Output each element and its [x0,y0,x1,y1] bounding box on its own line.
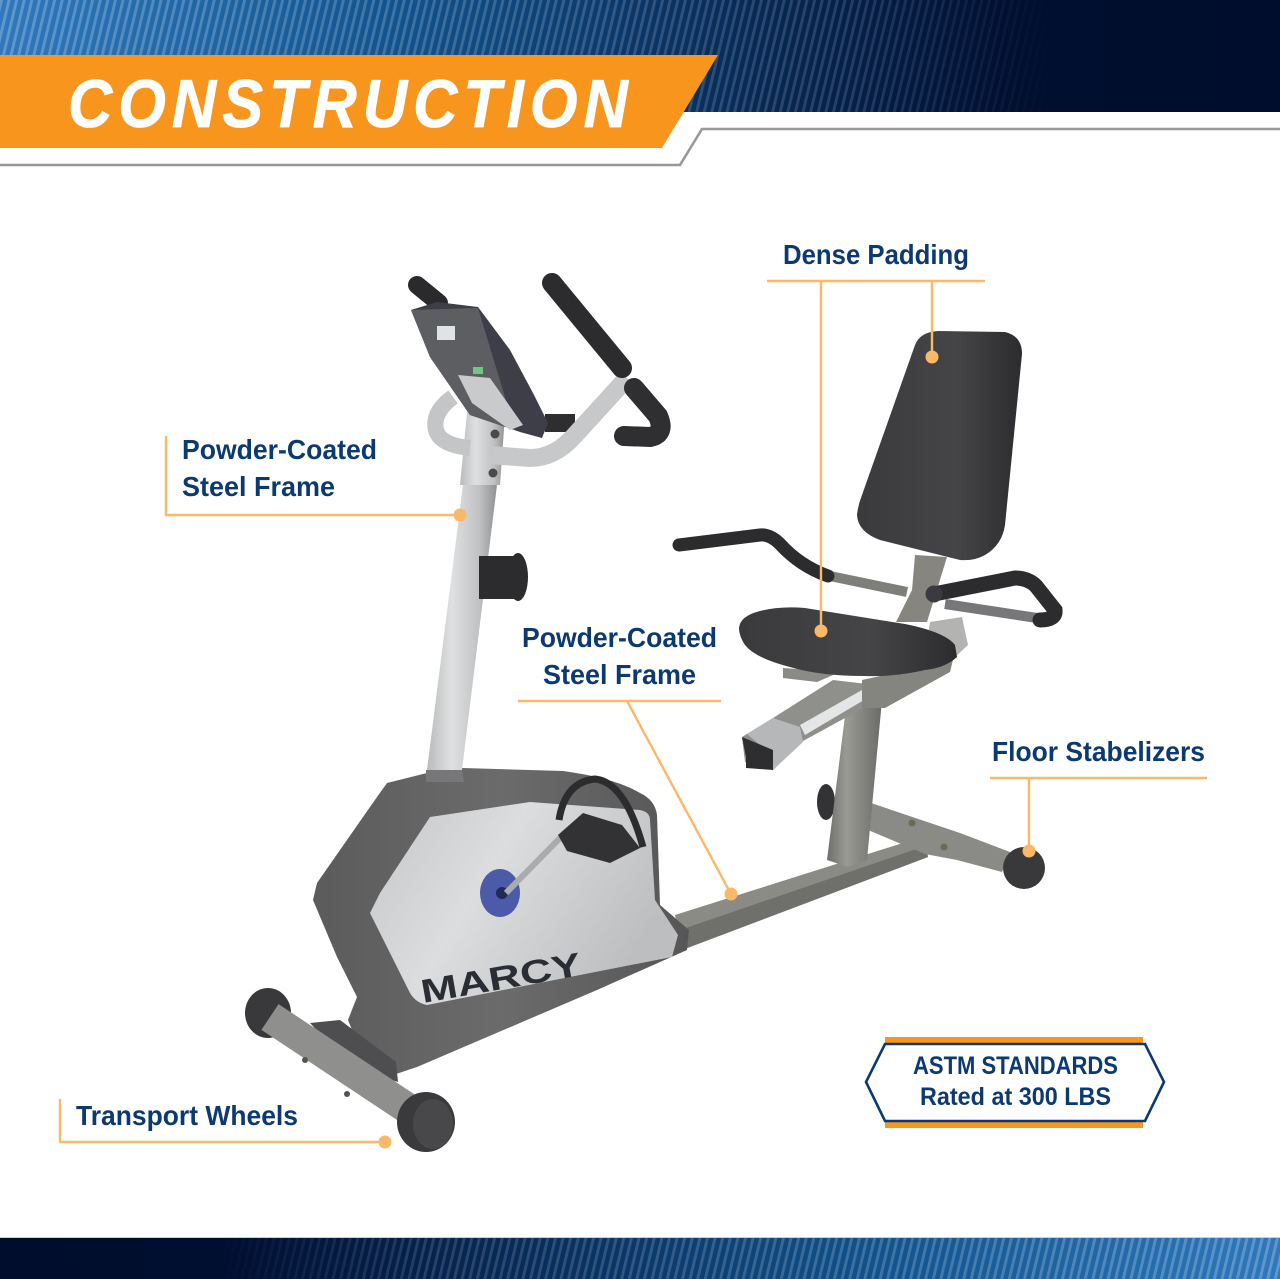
right armrest [926,578,1055,620]
callout: transport wheels [60,1099,392,1148]
seat bracket [925,617,968,659]
badge: astm standards: Rated at 300 LBS [920,1083,1111,1111]
under seat plate [783,668,840,682]
title: CONSTRUCTION [68,65,629,142]
callout: frame, lower: Powder-Coated [522,622,717,653]
upright post [426,403,505,782]
side panel [370,802,678,1005]
exercise bike illustration [245,283,1055,1152]
footer band [0,1237,1280,1279]
handlebars [417,283,661,478]
rear adjustment knob [817,784,835,820]
callout: transport wheels: Transport Wheels [76,1100,298,1131]
seat slider [742,660,953,770]
header banner [0,0,1280,112]
header angled outline [0,129,1280,165]
badge: astm standards: ASTM STANDARDS [913,1052,1118,1080]
title banner [0,55,718,148]
seat column [827,700,882,867]
callout: dense padding [767,239,985,638]
marcy logo: MARCY [418,946,584,1010]
left armrest [679,535,907,592]
callout: floor stabilizers: Floor Stabelizers [992,736,1205,767]
callout: floor stabilizers [990,736,1207,858]
console [411,302,548,438]
callout: frame, lower [518,622,738,900]
backrest [857,331,1022,560]
pedal [558,779,643,863]
crank and disc [480,838,560,917]
main base beam [675,836,928,950]
seat back support [896,555,947,622]
rear stabilizer and transport wheels [245,988,455,1152]
callout: frame, upper: Powder-Coated [182,434,377,465]
front floor stabilizer [868,802,1045,889]
callout: frame, upper: Steel Frame [182,471,335,502]
badge: astm standards [866,1037,1164,1128]
callout: dense padding: Dense Padding [783,239,969,270]
flywheel housing [313,768,689,1075]
resistance knob [479,553,528,601]
seat pad [739,607,957,676]
callout: frame, lower: Steel Frame [543,659,696,690]
callout: frame, upper [166,434,466,522]
